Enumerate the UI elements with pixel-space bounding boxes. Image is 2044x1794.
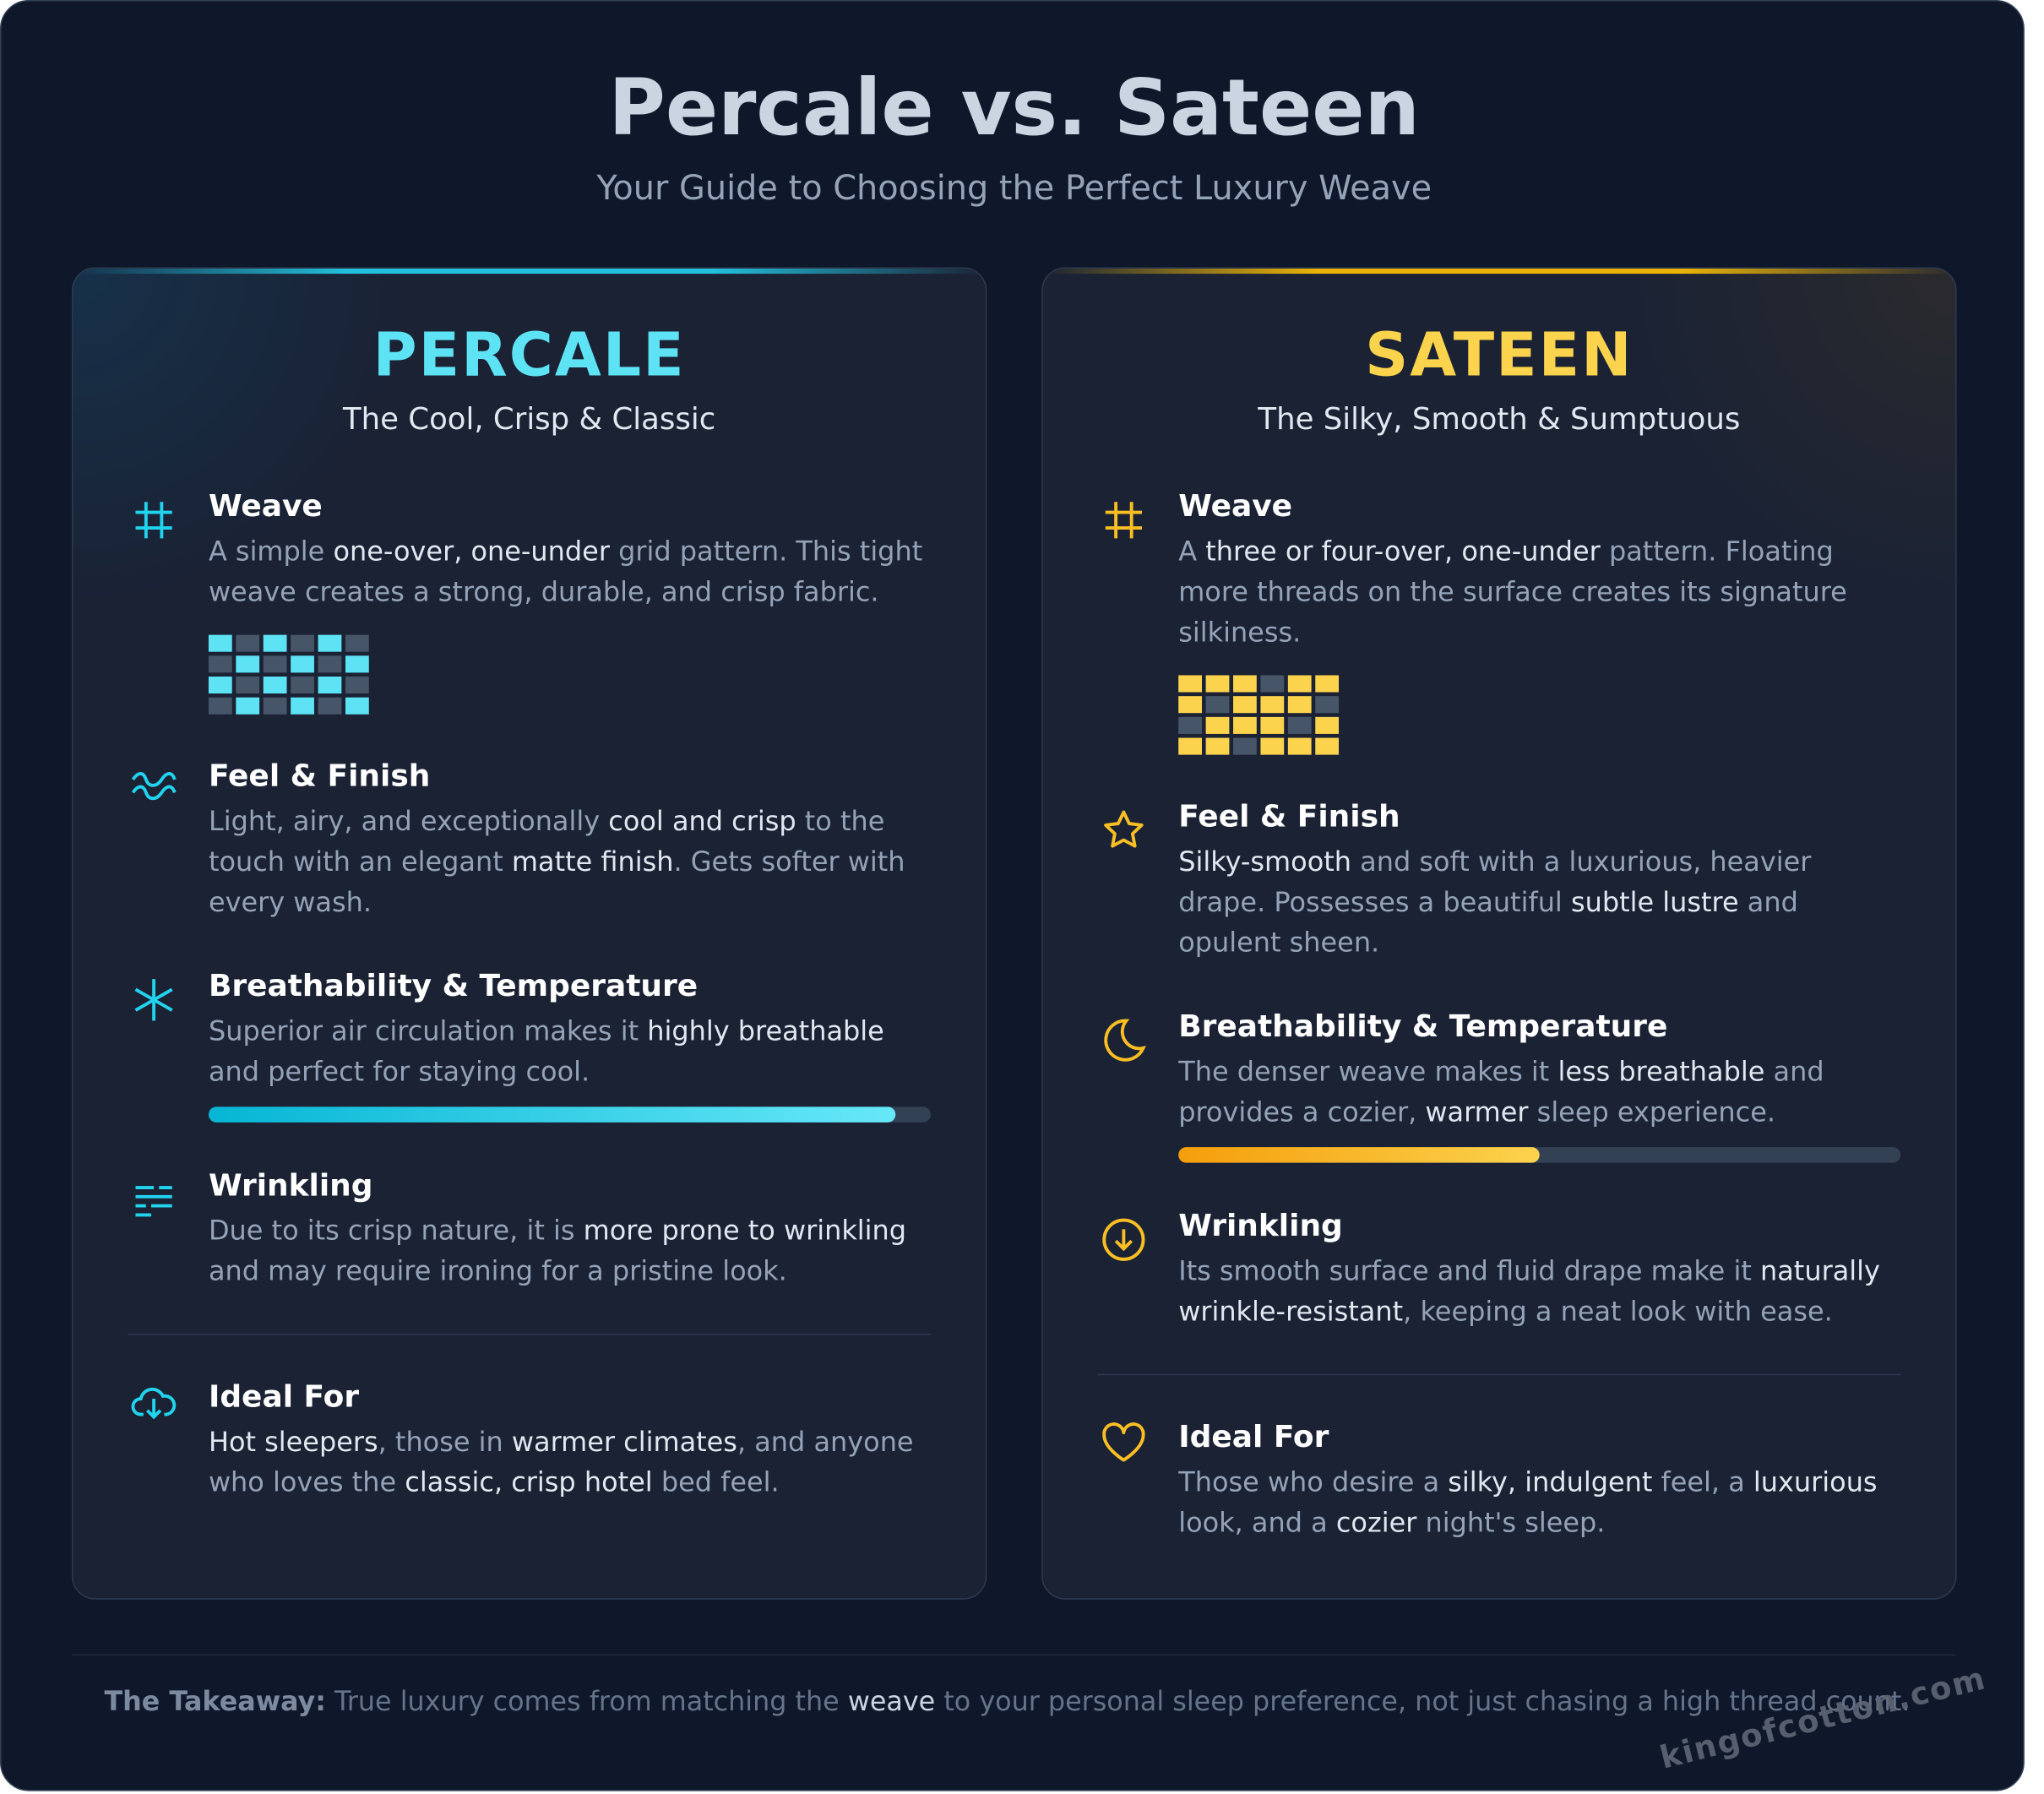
feel text: Light, airy, and exceptionally cool and crisp to the touch with an elegant matte finish. Gets softer with every wash. [209,806,905,918]
icon: arrow circle [1102,1218,1145,1261]
panel: percale [72,267,987,1600]
ideal heading: Ideal For [209,1379,359,1415]
weave text: A simple one-over, one-under grid pattern. This tight weave creates a strong, durable, and crisp fabric. [209,535,922,607]
bar [209,1106,931,1123]
wrinkling text: Its smooth surface and fluid drape make it naturally wrinkle-resistant, keeping a neat look with ease. [1178,1255,1880,1327]
icon: waves [132,772,177,801]
icon: heart [1102,1422,1145,1461]
icon: cloud [132,1387,176,1419]
icon: hash [135,502,172,539]
bar [1178,1147,1900,1163]
heading: SATEEN [1365,319,1634,389]
weave heading: Weave [1178,489,1292,524]
ideal heading: Ideal For [1178,1420,1329,1454]
tagline: The Silky, Smooth & Sumptuous [1258,403,1740,437]
icon: moon [1104,1019,1146,1062]
icon: snowflake [135,979,173,1020]
breathability heading: Breathability & Temperature [1178,1009,1667,1044]
heading: PERCALE [373,319,686,389]
feel text: Silky-smooth and soft with a luxurious, heavier drape. Possesses a beautiful subtle lustre and opulent sheen. [1178,846,1811,958]
wrinkling text: Due to its crisp nature, it is more prone to wrinkling and may require ironing for a pristine look. [209,1215,906,1286]
weave grid [208,635,369,715]
wrinkling heading: Wrinkling [209,1168,373,1204]
breathability text: Superior air circulation makes it highly breathable and perfect for staying cool. [209,1015,884,1087]
breathability heading: Breathability & Temperature [209,969,698,1003]
accent line [73,269,986,274]
feel heading: Feel & Finish [209,758,430,794]
tagline: The Cool, Crisp & Classic [343,403,715,437]
weave heading: Weave [209,489,323,524]
icon: hash [1105,502,1142,539]
wrinkling heading: Wrinkling [1178,1209,1343,1243]
weave grid [1178,675,1340,755]
takeaway: The Takeaway: True luxury comes from matching the weave to your personal sleep preference, not just chasing a high thread count. [104,1686,1910,1717]
weave text: A three or four-over, one-under pattern. Floating more threads on the surface creates its signature silkiness. [1178,535,1847,648]
icon: star [1104,811,1144,848]
title: Percale vs. Sateen [609,64,1420,154]
watermark: kingofcotton.com [1656,1660,1990,1776]
ideal text: Hot sleepers, those in warmer climates, and anyone who loves the classic, crisp hotel bed feel. [209,1426,914,1498]
breathability text: The denser weave makes it less breathable and provides a cozier, warmer sleep experience. [1178,1056,1824,1128]
ideal text: Those who desire a silky, indulgent feel, a luxurious look, and a cozier night's sleep. [1178,1466,1878,1538]
icon: lines [135,1186,172,1216]
accent line [1043,269,1955,274]
panel: sateen [1041,267,1957,1600]
feel heading: Feel & Finish [1178,799,1400,834]
subtitle: Your Guide to Choosing the Perfect Luxury Weave [596,170,1432,209]
